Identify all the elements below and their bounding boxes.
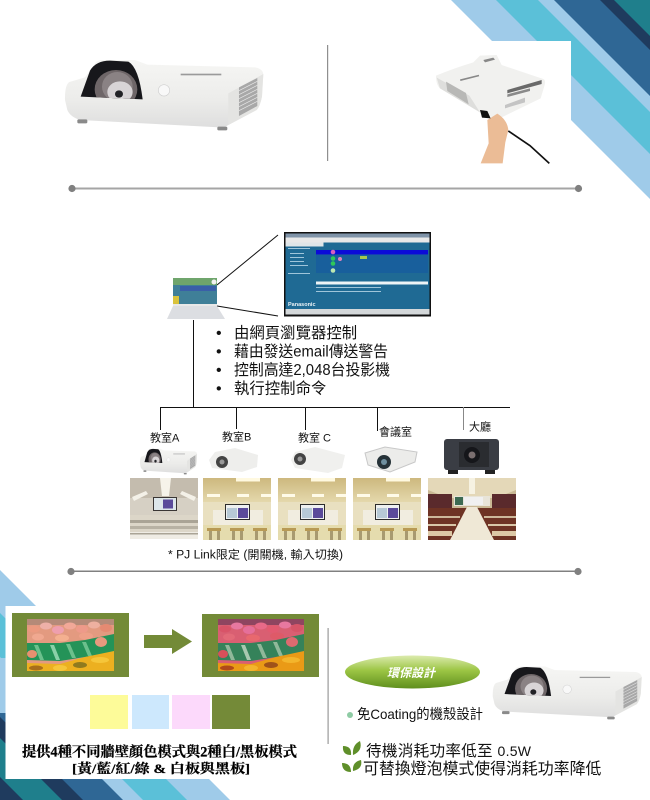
- bullet: no-coating cabinet: 免Coating的機殼設計: [357, 706, 483, 722]
- classroom labels: 教室 C: [298, 430, 331, 444]
- arrow: to corrected image: [144, 629, 192, 654]
- photo: hand unplugging projector power cord: [436, 55, 549, 163]
- icon: classroom B projector: [209, 448, 258, 472]
- icon: green leaves, lamp mode: [342, 760, 361, 772]
- white panel: colour modes: [6, 606, 328, 779]
- bottom-left corner diagonal stripes: [0, 570, 230, 800]
- divider line with end dots: top: [68, 185, 582, 192]
- bullet list: control features: 由網頁瀏覽器控制: [234, 324, 357, 342]
- caption: colour modes: 提供4種不同牆壁顏色模式與2種白/黑板模式: [22, 742, 297, 760]
- text: standby power: 待機消耗功率低至 0.5W: [366, 742, 532, 760]
- text: lamp mode power saving: 可替換燈泡模式使得消耗功率降低: [363, 760, 601, 778]
- classroom labels: 會議室: [379, 424, 412, 438]
- classroom labels: [150, 420, 491, 444]
- panel: after colour-correction flower image: [202, 614, 319, 677]
- classroom labels: 教室A: [150, 430, 180, 444]
- icon: green leaves, standby power: [343, 741, 361, 755]
- badge: eco design: 環保設計: [387, 666, 437, 680]
- footnote: * PJ Link限定 (開關機, 輸入切換): [168, 548, 343, 562]
- photo: classroom C: [278, 478, 346, 540]
- network diagram: connector lines: [160, 235, 510, 431]
- icon: classroom C projector: [291, 447, 345, 473]
- bullet list: control features: •: [216, 344, 222, 360]
- classroom labels: 教室B: [222, 430, 251, 444]
- badge: eco design: [345, 656, 480, 688]
- panel: before colour-correction flower image: [12, 613, 129, 677]
- bullet list: control features: 藉由發送email傳送警告: [234, 342, 388, 360]
- screenshot: browser control software: [284, 232, 431, 316]
- bullet list: control features: 執行控制命令: [234, 380, 326, 398]
- bullet list: control features: •: [216, 325, 222, 342]
- bullet list: control features: 控制高達2,048台投影機: [234, 361, 390, 379]
- caption: colour modes: [黃/藍/紅/綠 & 白板與黑板]: [72, 761, 250, 777]
- classroom labels: 大廳: [469, 420, 491, 434]
- photo: meeting room: [353, 478, 421, 540]
- bullet list: control features: •: [216, 362, 222, 379]
- photo: large hall: [428, 478, 516, 540]
- photo: classroom B: [203, 478, 271, 540]
- icon: laptop: [167, 278, 225, 319]
- colour swatches: yellow, blue, pink, green: [90, 695, 250, 729]
- icon: meeting room projector: [365, 447, 417, 472]
- screenshot: browser control software: Panasonic: [288, 302, 316, 308]
- photo: classroom A: [130, 478, 198, 539]
- bullet list: control features: [216, 324, 390, 398]
- icon: classroom A short-throw projector: [140, 449, 197, 474]
- photo: short-throw projector, eco section: [493, 667, 642, 719]
- photo: short-throw projector front: [65, 60, 263, 130]
- bullet list: control features: •: [216, 380, 222, 398]
- top-right corner diagonal stripes: [451, 0, 650, 249]
- divider: bottom section: [328, 628, 329, 744]
- divider: top section: [327, 45, 328, 161]
- white photo panel over corner stripes: [420, 41, 571, 141]
- icon: large hall projector: [444, 439, 499, 474]
- divider line with end dot: middle: [67, 568, 582, 575]
- caption: colour modes: [22, 742, 297, 777]
